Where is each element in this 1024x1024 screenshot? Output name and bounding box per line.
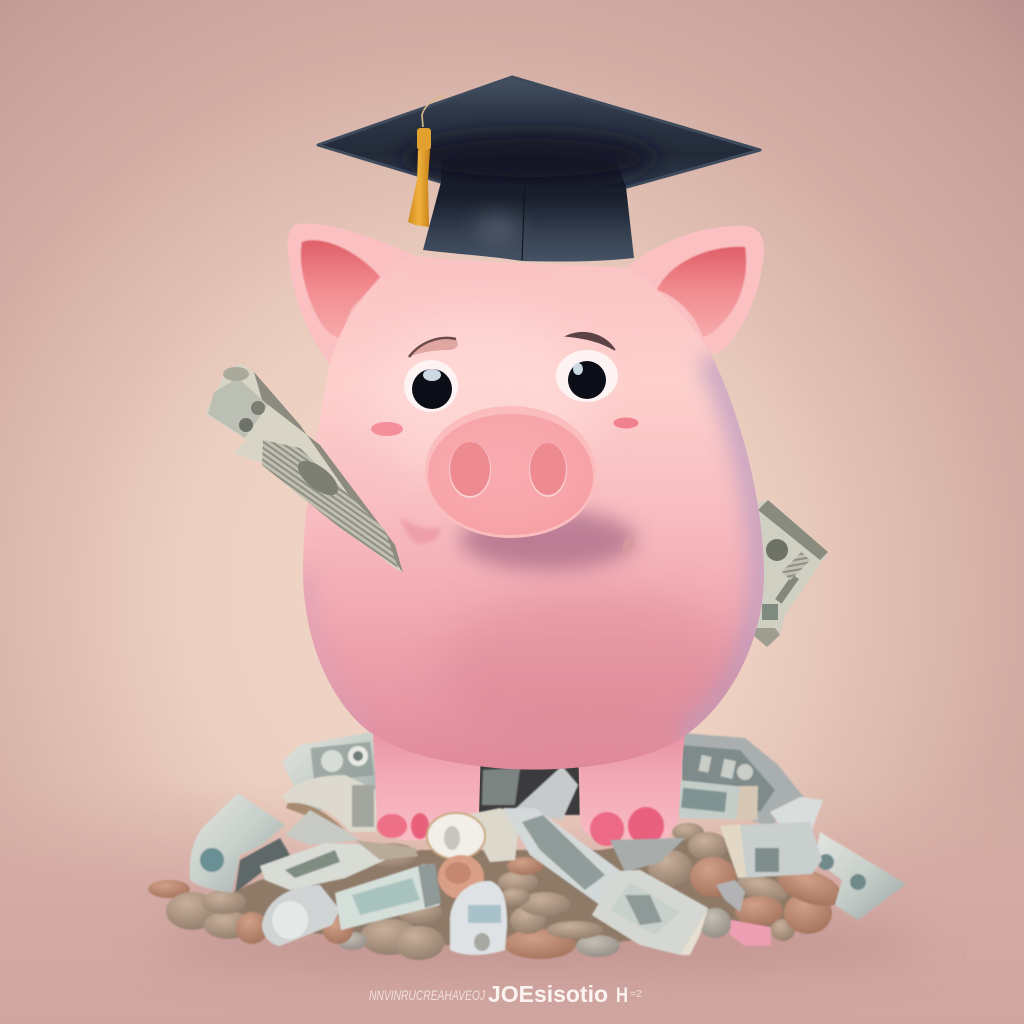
hind legs [372, 720, 686, 846]
belly spot [621, 536, 635, 554]
bill: behind pig right [745, 500, 828, 647]
caption: NNVINRUCREAHAVEOJ [369, 987, 486, 1003]
caption: H [616, 984, 628, 1007]
darker belly [454, 592, 734, 724]
left middle bills [260, 810, 418, 890]
bill: in pig's mouth [205, 363, 403, 573]
left roll [282, 775, 376, 832]
far right bill [815, 832, 906, 920]
left cheek [371, 422, 403, 436]
left standing bill [190, 793, 290, 893]
white packet [450, 881, 507, 955]
lilac rim on the right [683, 356, 764, 737]
cap board [318, 77, 760, 187]
head highlight [392, 331, 568, 466]
dark gap between legs [478, 762, 580, 815]
right bundle [720, 822, 822, 878]
white bundle left [262, 885, 340, 946]
cap seam [522, 180, 525, 260]
snout [425, 406, 596, 538]
left ear [287, 223, 420, 368]
flat grey bill under foot [610, 838, 685, 872]
board shadow blending into base [405, 132, 655, 184]
left eyebrow [409, 338, 458, 357]
pile base [215, 835, 825, 945]
snout shadow [460, 510, 636, 570]
long slanting bill [503, 808, 630, 905]
body [303, 255, 764, 770]
tassel [408, 128, 431, 227]
caption [369, 981, 642, 1007]
right roll [676, 780, 758, 820]
right cheek [614, 418, 638, 428]
coins [148, 823, 847, 960]
tassel cord [422, 95, 447, 127]
graduation cap [318, 77, 760, 262]
teal bundle [335, 863, 441, 930]
left eye [404, 360, 458, 412]
lilac rim lower left [304, 572, 356, 718]
right eye [556, 350, 618, 402]
money pile behind pig [282, 732, 823, 832]
caption: =2 [630, 989, 642, 1000]
cap base [423, 155, 634, 262]
pig [287, 223, 764, 846]
back right bill [682, 733, 806, 826]
front money and coins pile [148, 793, 906, 960]
right eyebrow [567, 333, 615, 350]
back left bill [282, 732, 380, 812]
cap highlight [475, 214, 519, 242]
mouth fold [400, 517, 440, 544]
small right bill [770, 797, 823, 830]
caption: JOEsisotio [488, 981, 608, 1007]
right ear [622, 226, 764, 353]
front right bundle [592, 870, 708, 955]
round white bundle [427, 808, 520, 899]
toes [377, 807, 664, 846]
